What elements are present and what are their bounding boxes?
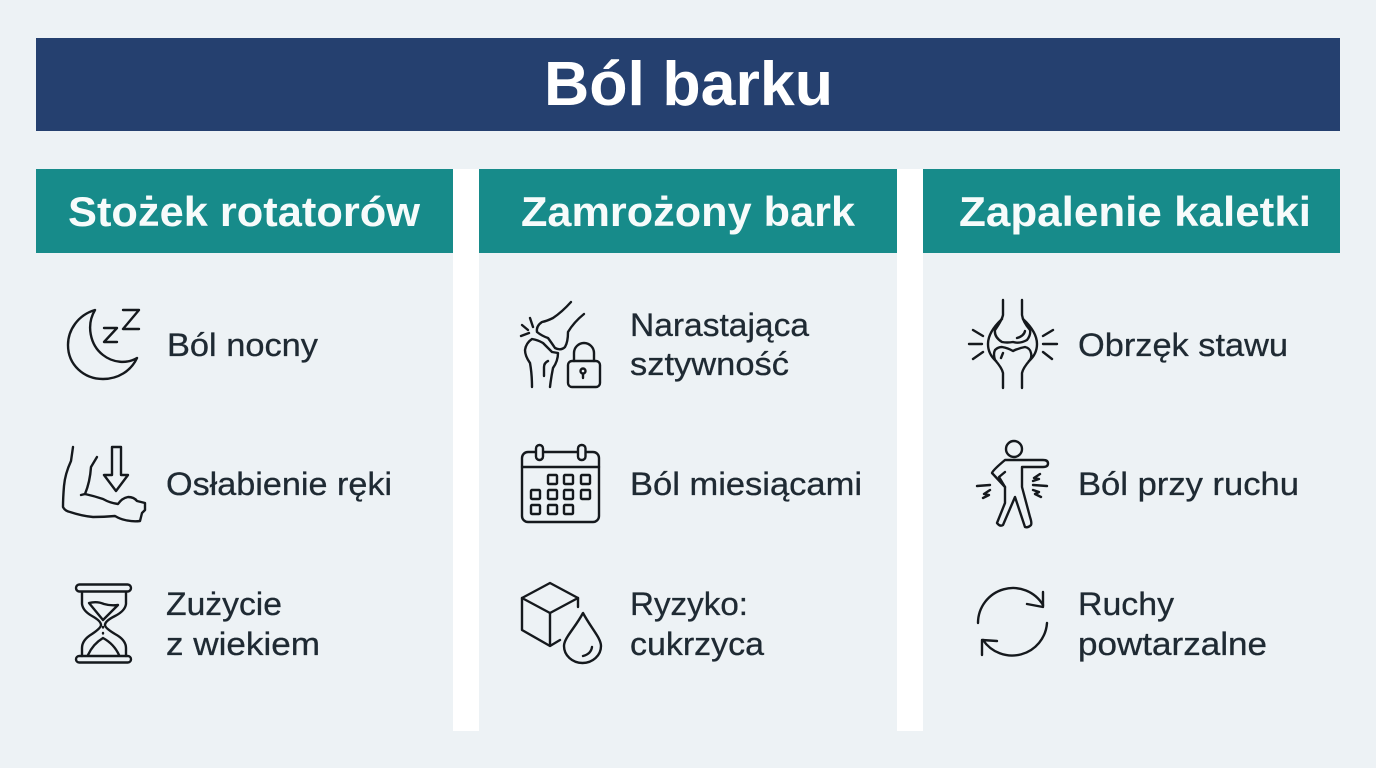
text: Osłabienie ręki: Osłabienie ręki <box>166 466 392 502</box>
text: Ryzyko: cukrzyca <box>630 586 764 662</box>
heading: Zapalenie kaletki: Zapalenie kaletki <box>959 188 1311 235</box>
text: Narastająca sztywność <box>630 307 809 382</box>
text: Obrzęk stawu: Obrzęk stawu <box>1078 327 1288 363</box>
icon: sugar cube and drop <box>522 583 601 663</box>
icon: swollen joint <box>969 300 1057 388</box>
text: Ruchy powtarzalne: Ruchy <box>1078 586 1174 622</box>
text: Ryzyko: cukrzyca: cukrzyca <box>630 626 764 662</box>
icon: weak arm with down arrow <box>63 447 145 521</box>
icon: person with pain marks <box>977 441 1048 527</box>
text: Ruchy powtarzalne <box>1078 586 1267 662</box>
icon: hourglass <box>76 584 131 662</box>
text: Ból miesiącami: Ból miesiącami <box>630 466 862 502</box>
heading: Zamrożony bark: Zamrożony bark <box>521 188 856 235</box>
text: Narastająca sztywność: sztywność <box>630 346 789 382</box>
text: Zużycie z wiekiem: Zużycie <box>166 586 282 622</box>
panel: Stożek rotatorów <box>36 169 453 662</box>
text: Narastająca sztywność: Narastająca <box>630 307 809 343</box>
title banner: Ból barku <box>544 50 833 119</box>
text: Zużycie z wiekiem <box>166 586 320 662</box>
text: Ryzyko: cukrzyca: Ryzyko: <box>630 586 748 622</box>
panel: Zapalenie kaletki <box>923 169 1340 662</box>
panel: Zamrożony bark <box>479 169 897 663</box>
text: Ból nocny: Ból nocny <box>167 327 318 363</box>
icon: repeat arrows <box>978 588 1047 656</box>
icon: stiff joint with padlock <box>521 302 600 387</box>
text: Ból przy ruchu: Ból przy ruchu <box>1078 466 1299 502</box>
heading: Zamrożony bark <box>479 169 897 253</box>
heading: Stożek rotatorów <box>36 169 453 253</box>
heading: Zapalenie kaletki <box>923 169 1340 253</box>
text: Ruchy powtarzalne: powtarzalne <box>1078 626 1267 662</box>
heading: Stożek rotatorów: Stożek rotatorów <box>68 188 420 235</box>
icon: moon with Z letters <box>68 310 139 379</box>
title banner <box>36 38 1340 131</box>
icon: calendar <box>522 445 599 522</box>
text: Zużycie z wiekiem: z wiekiem <box>166 626 320 662</box>
